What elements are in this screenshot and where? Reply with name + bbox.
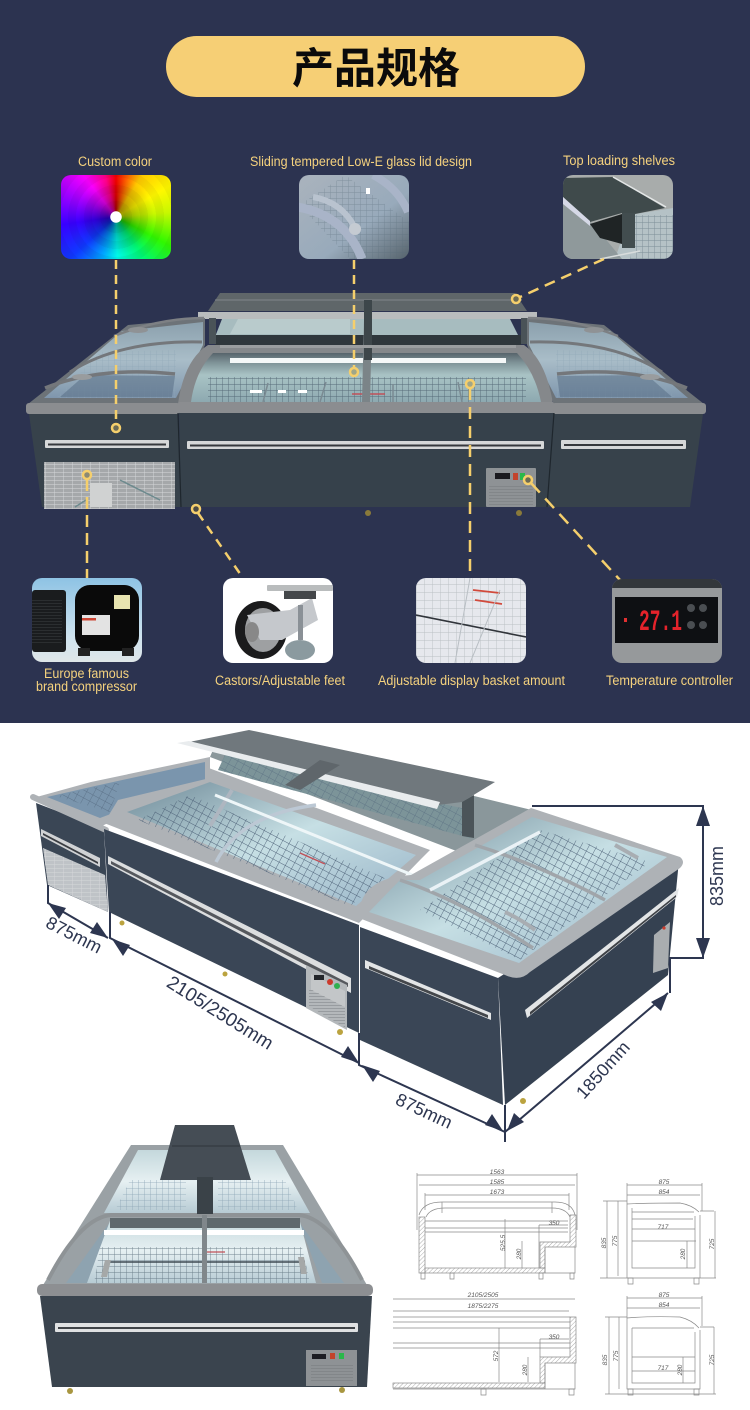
technical drawing dimension numbers: 2105/2505 [467, 1292, 499, 1299]
callout captions, top row: Sliding tempered Low-E glass lid design [250, 154, 472, 169]
compressor grill [44, 462, 175, 509]
canopy shelf [198, 293, 537, 345]
technical drawing dimension numbers: 725 [709, 1238, 716, 1249]
technical drawing: end section C [600, 1183, 716, 1284]
callout captions, bottom row [36, 666, 733, 694]
technical drawing dimension numbers: 1563 [490, 1169, 505, 1176]
technical drawing dimension numbers: 717 [658, 1365, 669, 1372]
back glass and shelf [210, 745, 540, 860]
left section top [33, 757, 210, 826]
technical drawing dimension numbers: 572 [493, 1350, 500, 1361]
callout captions, top row: Custom color [78, 154, 152, 169]
left section body [36, 803, 108, 912]
castors [337, 1029, 343, 1035]
technical drawing dimension numbers: 525.5 [500, 1234, 507, 1251]
technical drawing dimension numbers: 775 [613, 1350, 620, 1361]
icon: temperature controller thumbnail [612, 579, 722, 663]
body [40, 1296, 372, 1387]
dimension labels: 835mm [707, 846, 727, 906]
technical drawing dimension numbers: 350 [549, 1334, 560, 1341]
icon: top loading shelf thumbnail [563, 175, 673, 259]
technical drawing dimension numbers: 725 [709, 1354, 716, 1365]
technical drawing dimension numbers: 280 [522, 1364, 529, 1376]
callout captions, bottom row: Castors/Adjustable feet [215, 673, 345, 688]
technical drawing: end section D [605, 1296, 716, 1395]
handle [55, 1323, 358, 1332]
dimension labels [43, 846, 727, 1133]
callout lines and markers [83, 259, 620, 580]
right control box [653, 922, 670, 973]
centre body [104, 829, 359, 1033]
right wing [527, 318, 704, 404]
technical drawing dimension numbers [467, 1169, 716, 1376]
side handle [525, 888, 679, 1018]
dark specification panel [0, 0, 750, 723]
right section side body [498, 860, 679, 1105]
glass top [43, 1145, 367, 1285]
white dimensions panel [0, 723, 750, 1410]
icon: castor thumbnail [223, 578, 333, 663]
callout captions, bottom row: brand compressor [36, 679, 137, 694]
front handle [365, 960, 491, 1020]
technical drawing dimension numbers: 280 [516, 1248, 523, 1260]
technical drawing dimension numbers: 350 [549, 1220, 560, 1227]
technical drawing dimension numbers: 1673 [490, 1189, 505, 1196]
callout captions, bottom row: Europe famous [44, 666, 129, 681]
control box [306, 965, 347, 1030]
central glass bay [178, 300, 553, 404]
canopy shelf [160, 1125, 251, 1180]
left rim [33, 797, 106, 830]
centre glass [104, 767, 430, 923]
right glass [369, 817, 667, 963]
technical drawing dimension numbers: 1875/2275 [468, 1303, 499, 1310]
technical drawing dimension numbers: 835 [601, 1237, 608, 1248]
technical drawing: side section B [393, 1299, 576, 1395]
icon: custom colour wheel [61, 175, 171, 259]
technical drawing dimension numbers: 1585 [490, 1179, 505, 1186]
icon: glass lid thumbnail [297, 175, 409, 259]
technical drawing dimension numbers: 875 [659, 1292, 670, 1299]
dimension labels: 875mm [393, 1089, 455, 1133]
technical drawing dimension numbers: 854 [659, 1302, 670, 1309]
rim [37, 1284, 373, 1296]
icon: compressor thumbnail [32, 578, 142, 662]
icon: basket thumbnail [416, 578, 526, 663]
dimension labels: 2105/2505mm [163, 972, 277, 1055]
body panels [29, 414, 181, 507]
technical drawing dimension numbers: 835 [602, 1354, 609, 1365]
dimension arrowheads [48, 806, 710, 1131]
front rim [26, 403, 180, 414]
control box [486, 468, 536, 507]
freezer: isometric view [33, 730, 683, 1105]
freezer: front perspective view [37, 1125, 373, 1394]
right rim [359, 808, 683, 978]
technical drawing dimension numbers: 717 [658, 1224, 669, 1231]
front glass bay [87, 1218, 316, 1283]
technical drawing dimension numbers: 854 [659, 1189, 670, 1196]
control box [306, 1350, 357, 1386]
icon: temperature controller thumbnail: 27.1 [639, 606, 682, 640]
dimension labels: 1850mm [572, 1037, 634, 1103]
title pill: 产品规格 [292, 45, 460, 92]
left wing [28, 318, 205, 404]
left grill [43, 848, 108, 912]
shelf canopy [177, 730, 495, 838]
technical drawing dimension numbers: 280 [680, 1248, 687, 1260]
dimension lines [48, 806, 703, 1142]
callout captions, bottom row: Adjustable display basket amount [378, 673, 565, 688]
callout captions, top row: Top loading shelves [563, 153, 675, 168]
handles [45, 440, 686, 449]
dimension labels: 875mm [43, 912, 105, 958]
castors [365, 510, 371, 516]
callout captions, top row [78, 153, 675, 169]
callout captions, bottom row: Temperature controller [606, 673, 733, 688]
technical drawing dimension numbers: 280 [677, 1364, 684, 1376]
castors [67, 1388, 73, 1394]
technical drawing dimension numbers: 775 [612, 1235, 619, 1246]
right section front body [360, 927, 503, 1105]
title pill [166, 36, 585, 97]
technical drawing: side section A [417, 1173, 577, 1279]
freezer: front view [26, 293, 706, 516]
technical drawing dimension numbers: 875 [659, 1179, 670, 1186]
